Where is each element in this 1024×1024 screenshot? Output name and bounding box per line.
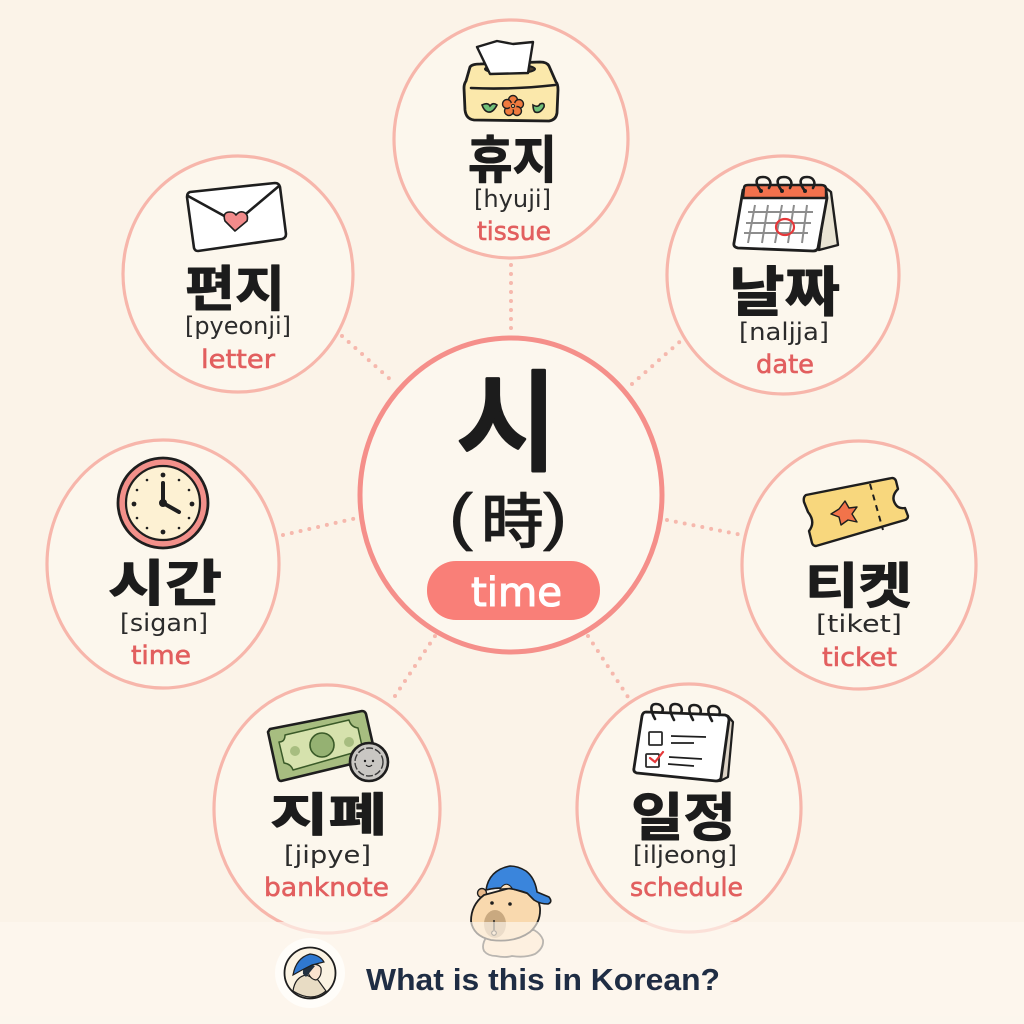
center hangul: 시 (456, 363, 558, 486)
word: jipye: 지폐 (270, 789, 387, 841)
icon: capybara mascot (471, 866, 551, 957)
romanization: [naljja] (739, 318, 829, 346)
meaning: banknote (264, 873, 389, 903)
romanization: [iljeong] (633, 841, 737, 869)
panel: center time (360, 338, 662, 652)
romanization: [hyuji] (474, 185, 551, 213)
avatar badge (275, 938, 345, 1008)
panel: ticket (742, 441, 976, 689)
icon: calendar (734, 177, 838, 251)
panel: tissue (394, 20, 628, 258)
romanization: [pyeonji] (185, 312, 291, 340)
footer question: What is this in Korean? (366, 962, 720, 997)
meaning: ticket (822, 643, 897, 673)
meaning: date (756, 350, 814, 380)
panel: schedule (577, 684, 801, 932)
panel: letter (123, 156, 353, 392)
head (471, 888, 540, 941)
meaning: schedule (630, 873, 743, 903)
meaning: time (131, 641, 191, 671)
hanja with parentheses: ( (449, 482, 473, 552)
bottom band (0, 922, 1024, 1024)
word: hyuji: 휴지 (468, 132, 557, 189)
hanja with parentheses: ) (543, 482, 567, 552)
panel: banknote (214, 685, 440, 933)
romanization: [tiket] (816, 610, 902, 638)
body (483, 930, 543, 957)
word: tiket: 티켓 (805, 560, 912, 614)
icon: envelope (187, 183, 286, 251)
word: sigan: 시간 (108, 556, 222, 612)
pill: time: time (471, 570, 562, 616)
meaning: tissue (477, 217, 551, 247)
word: naljja: 날짜 (729, 263, 840, 323)
panel: time (47, 440, 279, 688)
hanja with parentheses (449, 482, 567, 556)
icon: ticket (804, 478, 908, 546)
icon: clock (118, 458, 208, 548)
hanja with parentheses: 時 (481, 489, 544, 556)
icon: planner (634, 704, 733, 781)
meaning: letter (201, 345, 275, 375)
pill: time (427, 561, 600, 620)
icon: banknote and coin (268, 711, 388, 781)
connector lines (283, 265, 742, 697)
romanization: [jipye] (284, 841, 371, 869)
word: iljeong: 일정 (631, 790, 736, 848)
icon: tissue box (464, 41, 558, 121)
panel: date (667, 156, 899, 394)
romanization: [sigan] (120, 609, 208, 637)
flower (502, 96, 524, 116)
cap (486, 866, 551, 904)
word: pyeonji: 편지 (185, 263, 285, 317)
